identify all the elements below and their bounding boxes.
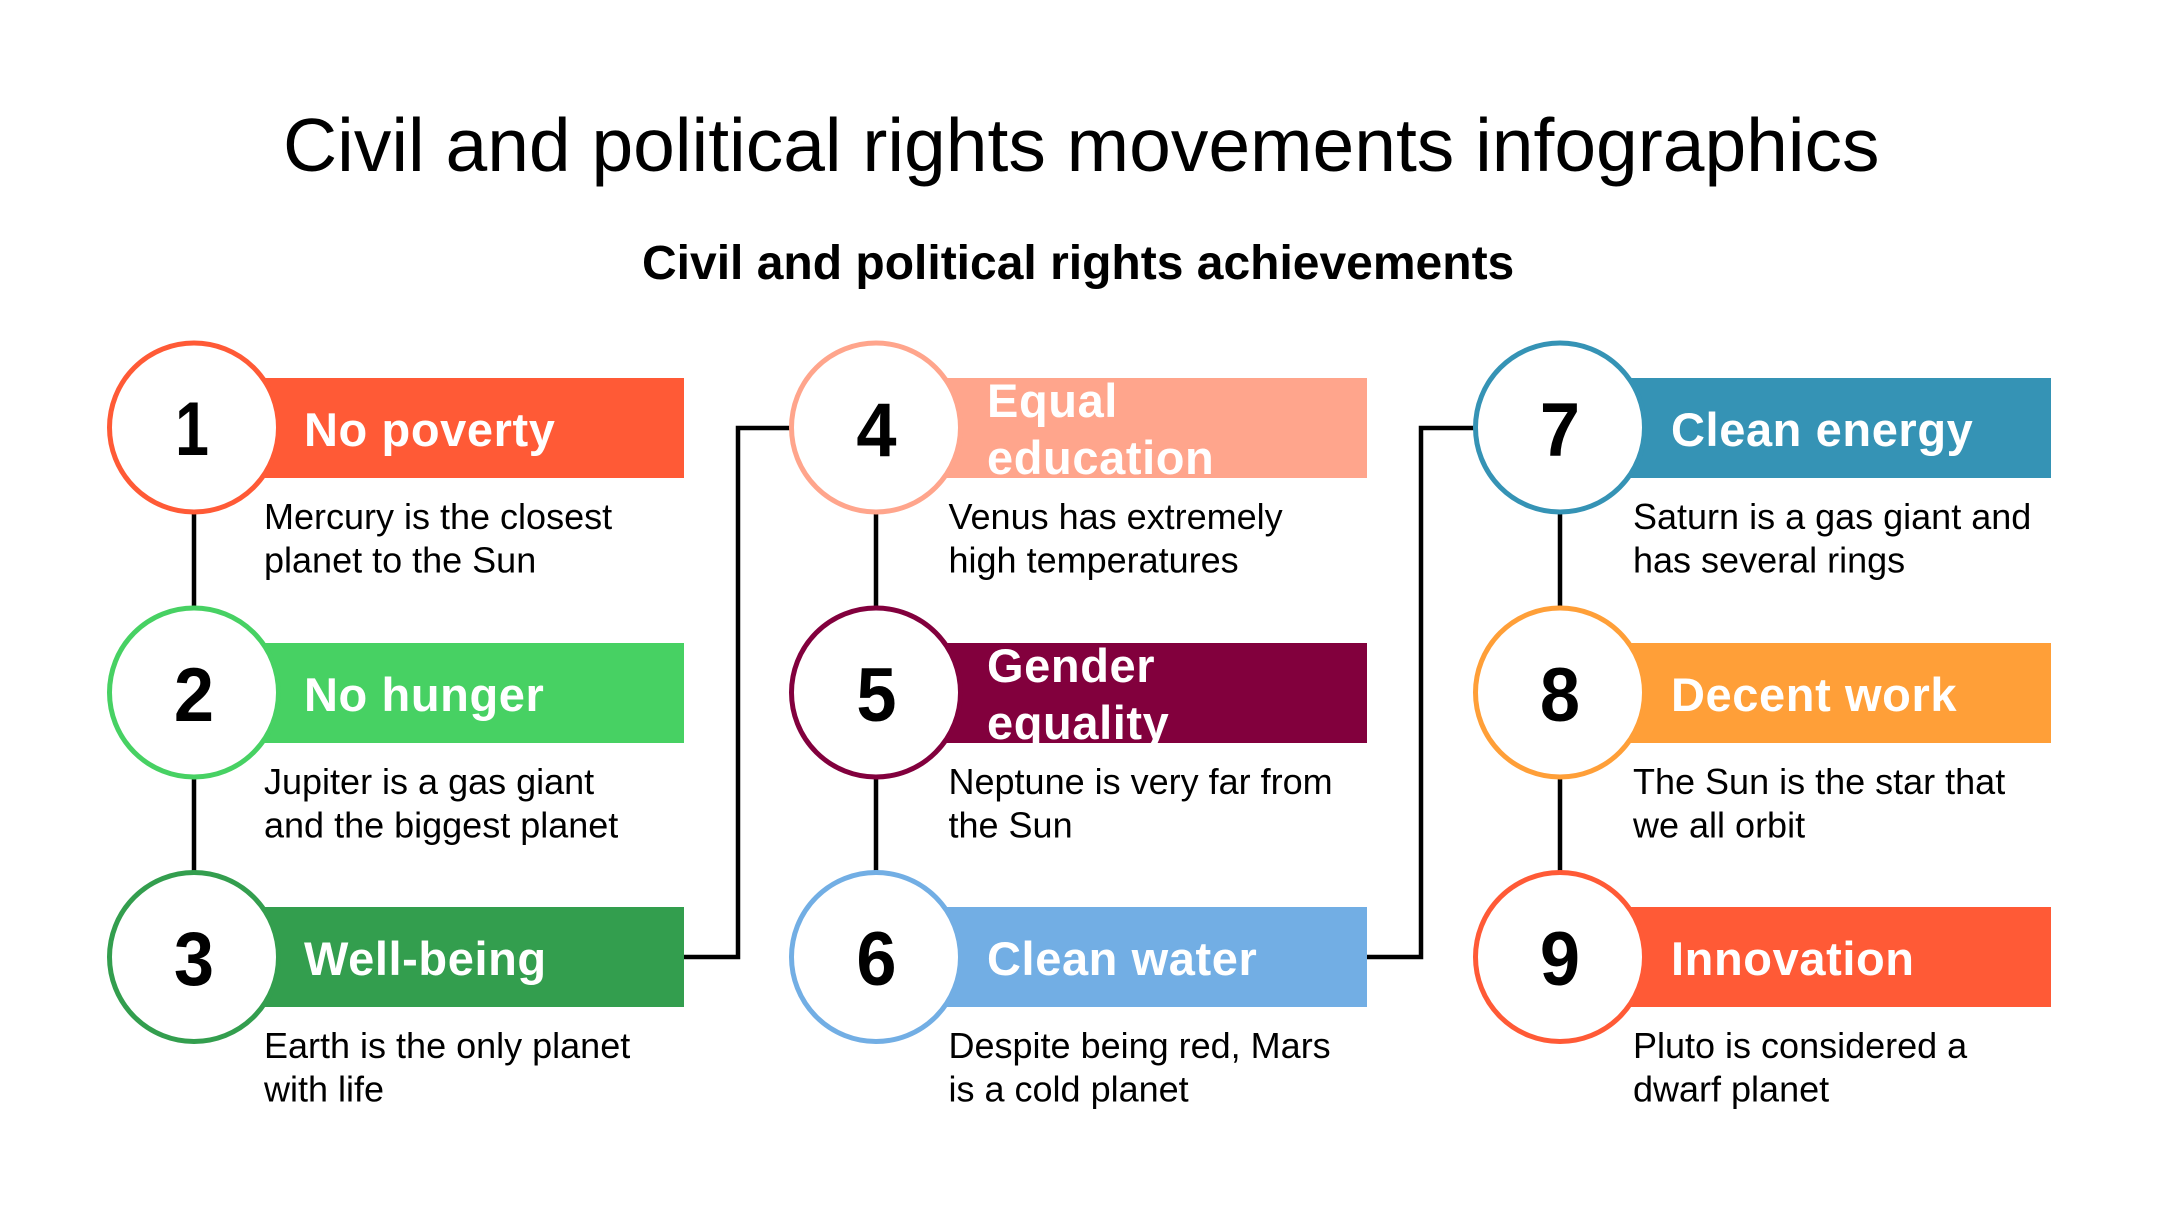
item 8: decent work: Decent work: [1671, 668, 1957, 721]
item 9: innovation: dwarf planet: [1633, 1068, 1829, 1110]
item 4: equal education: 4: [856, 387, 897, 472]
item 2: no hunger: 2: [174, 652, 214, 737]
connector: items 7 to 8 to 9: [1558, 505, 1562, 885]
item 7: clean energy: Saturn is a gas giant and: [1633, 496, 2031, 537]
item 5: gender equality: 5: [856, 652, 897, 737]
item 5: gender equality: equality: [987, 696, 1169, 749]
item 7: clean energy: has several rings: [1633, 540, 1905, 580]
item 1: no poverty: Mercury is the closest: [264, 496, 612, 537]
item 4: equal education: [792, 343, 1367, 580]
connector: items 4 to 5 to 6: [874, 505, 878, 885]
connector: item 6 to item 7: [1367, 428, 1480, 957]
item 8: decent work: The Sun is the star that: [1633, 761, 2005, 802]
item 5: gender equality: Neptune is very far from: [948, 761, 1333, 802]
item 9: innovation: 9: [1540, 916, 1580, 1001]
connector: items 1 to 2 to 3: [192, 505, 196, 885]
item 5: gender equality: the Sun: [948, 804, 1073, 846]
item 2: no hunger: and the biggest planet: [264, 804, 618, 846]
item 3: well-being: Well-being: [304, 932, 547, 985]
item 3: well-being: with life: [263, 1068, 384, 1110]
item 7: clean energy: [1476, 343, 2051, 580]
item 2: no hunger: No hunger: [304, 668, 544, 721]
item 8: decent work: [1476, 608, 2051, 846]
item 1: no poverty: 1: [175, 387, 209, 472]
item 4: equal education: Venus has extremely: [948, 496, 1283, 537]
item 7: clean energy: Clean energy: [1671, 403, 1973, 456]
title: Civil and political rights movements infographics: [283, 103, 1880, 187]
subtitle: Civil and political rights achievements: [642, 237, 1514, 290]
item 9: innovation: Innovation: [1671, 932, 1915, 985]
item 6: clean water: Clean water: [987, 932, 1257, 985]
item 9: innovation: [1476, 872, 2051, 1110]
item 4: equal education: education: [987, 431, 1214, 484]
item 2: no hunger: Jupiter is a gas giant: [264, 761, 594, 802]
connector: item 3 to item 4: [684, 428, 795, 957]
item 8: decent work: 8: [1540, 652, 1580, 737]
item 9: innovation: Pluto is considered a: [1633, 1025, 1968, 1066]
item 6: clean water: 6: [856, 916, 897, 1001]
item 3: well-being: Earth is the only planet: [264, 1025, 630, 1066]
item 1: no poverty: [110, 343, 684, 580]
item 4: equal education: high temperatures: [948, 540, 1239, 580]
item 7: clean energy: 7: [1540, 387, 1580, 472]
item 6: clean water: is a cold planet: [948, 1068, 1189, 1110]
item 2: no hunger: [110, 608, 684, 846]
item 3: well-being: 3: [174, 916, 214, 1001]
item 6: clean water: [792, 872, 1367, 1110]
item 1: no poverty: No poverty: [304, 403, 556, 456]
item 6: clean water: Despite being red, Mars: [948, 1025, 1331, 1066]
item 5: gender equality: [792, 608, 1367, 846]
item 3: well-being: [110, 872, 684, 1110]
item 8: decent work: we all orbit: [1632, 804, 1805, 846]
item 4: equal education: Equal: [987, 374, 1118, 427]
item 5: gender equality: Gender: [987, 639, 1155, 692]
item 1: no poverty: planet to the Sun: [264, 540, 536, 580]
